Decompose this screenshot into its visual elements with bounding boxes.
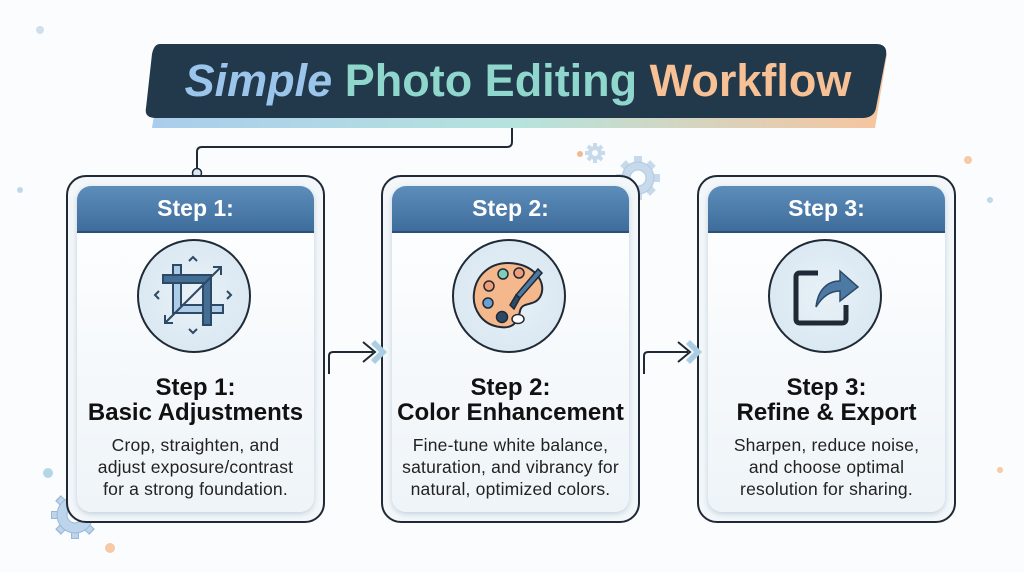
heading: step 2 <box>392 186 629 233</box>
title banner <box>146 44 887 128</box>
step 2 description: natural, optimized colors. <box>411 479 610 499</box>
heading: step 3: Step 3: <box>788 195 865 221</box>
heading: step 3 <box>708 186 945 233</box>
heading: step 1: Step 1: <box>157 195 234 221</box>
step 2 description <box>402 435 619 499</box>
step 3 description <box>734 435 919 499</box>
step 1 description: for a strong foundation. <box>103 479 288 499</box>
arrow: step 1 to step 2 <box>328 340 387 374</box>
step 1 description: Crop, straighten, and <box>112 435 279 455</box>
icon: crop <box>137 239 251 353</box>
step 3 description: Sharpen, reduce noise, <box>734 435 919 455</box>
heading: step 2: Step 2: <box>472 195 549 221</box>
panel: step 2 <box>381 175 640 523</box>
step 1 title <box>88 374 303 426</box>
icon: export <box>768 239 882 353</box>
heading: step 1 <box>77 186 314 233</box>
step 2 description: Fine-tune white balance, <box>413 435 608 455</box>
step 3 description: and choose optimal <box>749 457 904 477</box>
step 3 description: resolution for sharing. <box>740 479 913 499</box>
step 1 description <box>98 435 293 499</box>
step 2 description: saturation, and vibrancy for <box>402 457 619 477</box>
step 1 title: Step 1: <box>155 374 236 401</box>
icon: palette <box>452 239 566 353</box>
step 3 title: Refine & Export <box>736 399 917 426</box>
panel: step 1 <box>66 175 325 523</box>
step 3 title: Step 3: <box>786 374 866 401</box>
title banner: Simple Photo Editing Workflow <box>185 55 851 106</box>
step 2 title: Color Enhancement <box>397 399 624 426</box>
step 3 title <box>736 374 917 426</box>
step 1 title: Basic Adjustments <box>88 399 303 426</box>
panel: step 3 <box>697 175 956 523</box>
step 2 title: Step 2: <box>470 374 550 401</box>
arrow: step 2 to step 3 <box>643 340 702 374</box>
step 2 title <box>397 374 624 426</box>
step 1 description: adjust exposure/contrast <box>98 457 293 477</box>
